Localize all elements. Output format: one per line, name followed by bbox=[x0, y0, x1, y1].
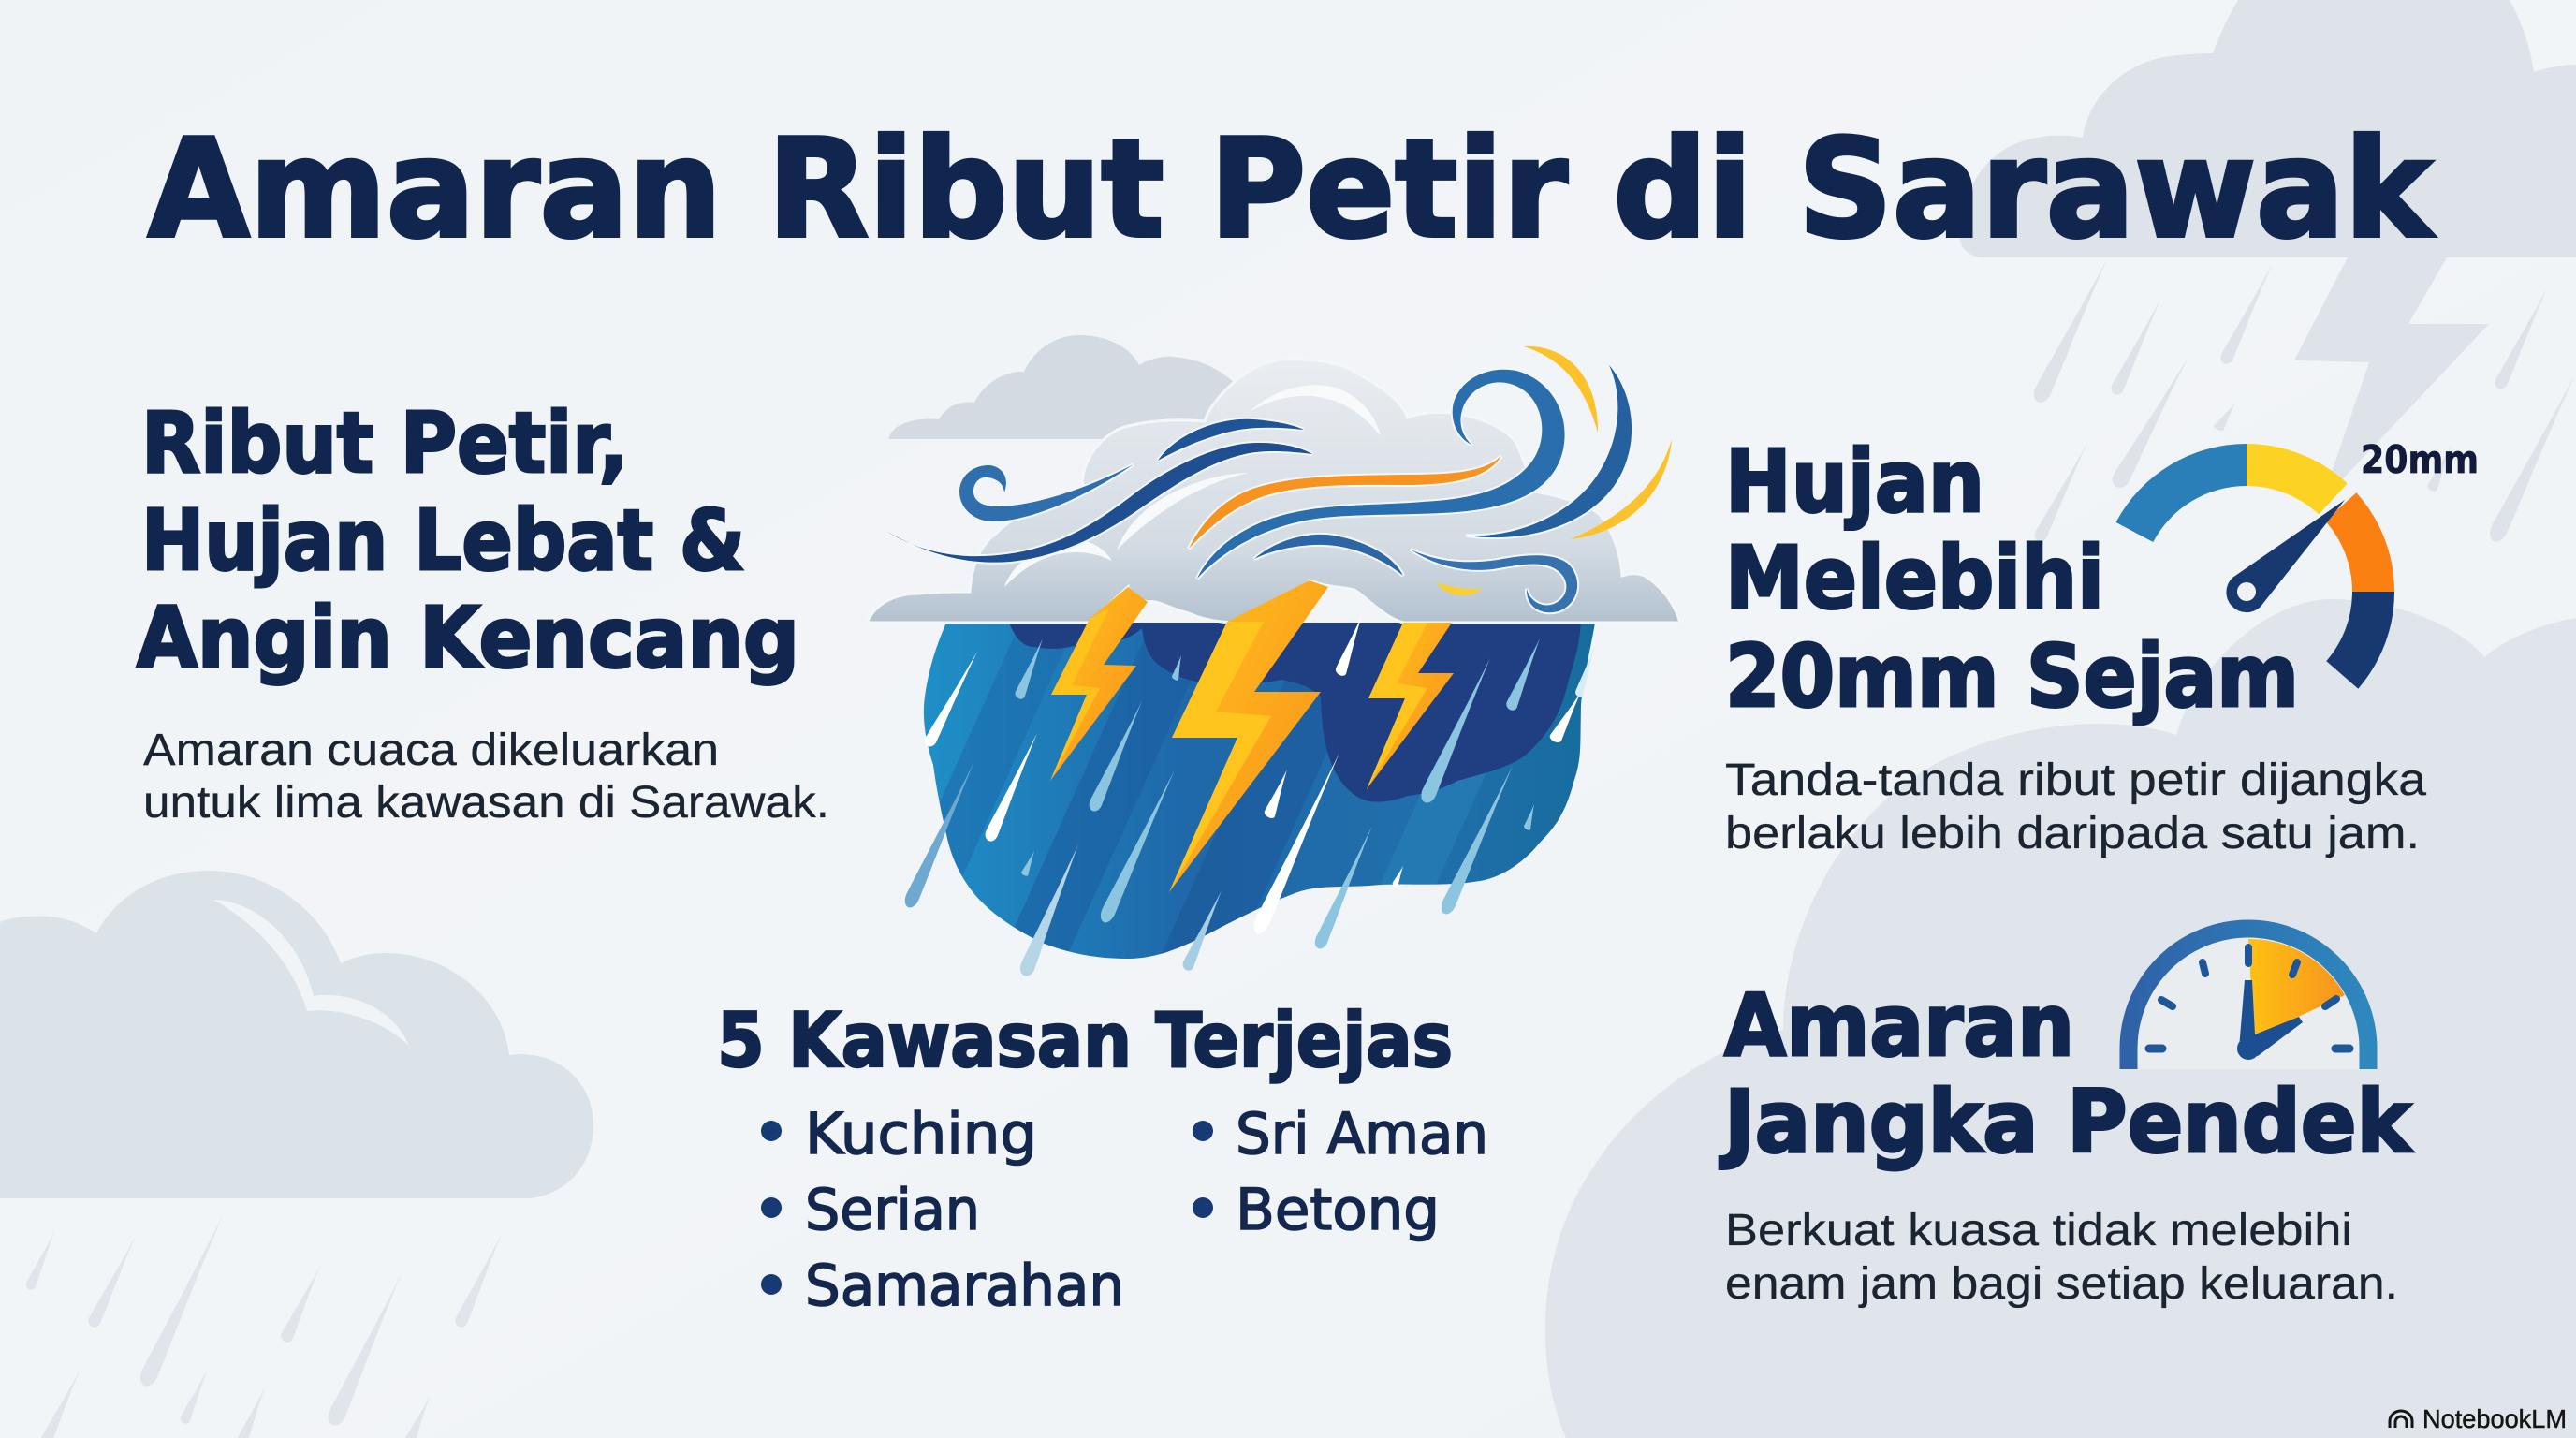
panel: 5 kawasan terjejas bbox=[717, 997, 1488, 1319]
district list, left column: Kuching bbox=[805, 1101, 1037, 1167]
notebooklm watermark: NotebookLM bbox=[2422, 1404, 2567, 1433]
district list, right column: Betong bbox=[1236, 1177, 1440, 1243]
body text: amaran cuaca: untuk lima kawasan di Sarawak. bbox=[143, 778, 829, 828]
body text: berkuat kuasa: enam jam bagi setiap keluaran. bbox=[1725, 1259, 2398, 1309]
district list, left column: Serian bbox=[805, 1177, 980, 1243]
body text: amaran cuaca bbox=[143, 726, 829, 828]
background: lower-right cloud bbox=[1545, 599, 2576, 1438]
district list, left column: Samarahan bbox=[805, 1253, 1124, 1319]
body text: berkuat kuasa bbox=[1725, 1206, 2398, 1309]
icon: rainfall gauge bbox=[2115, 444, 2394, 689]
panel: amaran jangka pendek bbox=[1719, 929, 2413, 1309]
heading: 5 kawasan terjejas: 5 Kawasan Terjejas bbox=[717, 997, 1453, 1084]
heading: amaran jangka pendek: Amaran bbox=[1724, 976, 2074, 1076]
body text: tanda-tanda ribut petir: berlaku lebih daripada satu jam. bbox=[1725, 809, 2420, 858]
heading: ribut petir: Hujan Lebat & bbox=[141, 492, 745, 589]
heading: ribut petir: Angin Kencang bbox=[137, 589, 799, 686]
rain cloud body bbox=[923, 623, 1595, 959]
body text: tanda-tanda ribut petir: Tanda-tanda ribut petir dijangka bbox=[1725, 756, 2426, 805]
wind swirls bbox=[886, 365, 1632, 612]
body text: tanda-tanda ribut petir bbox=[1725, 756, 2426, 858]
heading: hujan melebihi 20mm sejam: Hujan bbox=[1725, 432, 1984, 532]
heading: hujan melebihi 20mm sejam bbox=[1725, 432, 2299, 726]
body text: berkuat kuasa: Berkuat kuasa tidak melebihi bbox=[1725, 1206, 2352, 1255]
lightning bolts bbox=[1050, 580, 1454, 892]
raindrops bbox=[902, 612, 1599, 979]
gauge label: 20mm: 20mm bbox=[2361, 437, 2479, 482]
yellow wind arcs bbox=[1436, 346, 1672, 595]
title: Amaran Ribut Petir di Sarawak bbox=[148, 110, 2435, 269]
background: lower-left cloud with rain bbox=[0, 871, 593, 1438]
heading: hujan melebihi 20mm sejam: Melebihi bbox=[1725, 528, 2104, 628]
panel: ribut petir, hujan lebat, angin kencang bbox=[137, 394, 829, 828]
main storm cloud bbox=[867, 360, 1680, 623]
district list, left column bbox=[761, 1101, 1124, 1319]
district list, right column bbox=[1193, 1101, 1488, 1243]
heading: ribut petir: Ribut Petir, bbox=[141, 394, 628, 492]
district list, right column: Sri Aman bbox=[1236, 1101, 1488, 1167]
body text: amaran cuaca: Amaran cuaca dikeluarkan bbox=[143, 726, 719, 775]
panel: hujan melebihi 20mm sejam bbox=[1725, 432, 2479, 858]
heading: hujan melebihi 20mm sejam: 20mm Sejam bbox=[1725, 626, 2299, 726]
heading: ribut petir bbox=[137, 394, 799, 686]
background: top-right storm cloud with rain and lightning bbox=[1960, 0, 2576, 545]
small grey back cloud bbox=[889, 335, 1236, 439]
heading: amaran jangka pendek: Jangka Pendek bbox=[1719, 1072, 2413, 1172]
heading: amaran jangka pendek bbox=[1719, 976, 2413, 1172]
icon: clock dial bbox=[2129, 929, 2368, 1069]
cloud highlights bbox=[1004, 385, 1381, 587]
central storm illustration bbox=[867, 335, 1680, 979]
